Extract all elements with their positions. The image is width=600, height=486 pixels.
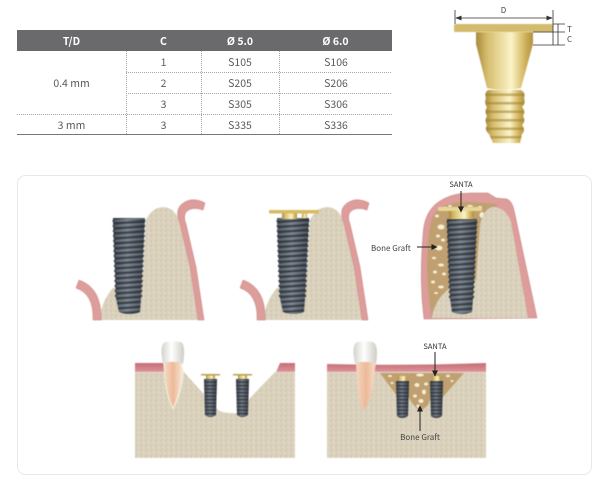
table header row: C: [160, 34, 167, 49]
dimension lines: [455, 10, 565, 45]
implant: [113, 218, 145, 314]
graft white particles: [431, 205, 484, 294]
tooth: [353, 342, 377, 411]
dimension labels: D: [501, 5, 507, 16]
gum left: [240, 280, 265, 320]
table header row: T/D: [63, 34, 80, 49]
dimension labels: C: [567, 34, 572, 45]
implant left: [396, 376, 409, 418]
illustration 2: implant with SANTA cap: [240, 200, 369, 320]
table body values: 0.4 mm: [53, 76, 90, 91]
implant left: [201, 374, 220, 417]
graft material: [427, 202, 497, 318]
table body values: 3 mm: [58, 118, 85, 133]
label: SANTA: SANTA: [449, 179, 473, 190]
bone: [263, 207, 362, 320]
gum: [327, 363, 486, 372]
bone block: [327, 372, 486, 458]
table header row: [17, 30, 392, 51]
table: T/D dimensions and product codes: [17, 30, 392, 135]
bone block: [135, 372, 295, 458]
gum left: [76, 280, 101, 320]
arrow to SANTA: [434, 352, 436, 376]
implant: [447, 219, 477, 314]
arrow to SANTA: [460, 191, 462, 212]
implant right: [233, 374, 252, 417]
table body values: 1: [161, 55, 167, 70]
illustration 4: ridge defect with two implants: [135, 342, 295, 458]
gold abutment flange: [454, 24, 553, 32]
table header row: Ø 5.0: [227, 34, 253, 49]
gold cap: [269, 210, 319, 219]
graft material: [380, 373, 464, 411]
dimension labels: T: [567, 24, 572, 35]
illustration 1: implant in ridge: [76, 200, 205, 320]
gold cap: [438, 207, 482, 219]
dimension labels: [501, 5, 572, 45]
implant: [277, 218, 309, 314]
table body values: 3: [161, 97, 167, 112]
arrow to bone graft: [417, 246, 437, 248]
table body values: S105: [228, 55, 252, 70]
table header row: Ø 6.0: [322, 34, 349, 49]
gold abutment thread: [485, 90, 525, 143]
illustration 3: bone graft over implant: [371, 179, 537, 319]
gum: [421, 193, 537, 319]
table body values: S205: [228, 76, 252, 91]
panel: surgical procedure illustrations: [18, 176, 592, 474]
table body values: S206: [324, 76, 348, 91]
bone: [99, 207, 198, 320]
table body values: S306: [324, 97, 348, 112]
bone: [432, 207, 528, 318]
gold abutment body: [476, 32, 533, 90]
graft white particles: [388, 374, 454, 408]
label: Bone Graft: Bone Graft: [371, 243, 411, 254]
abutment diagram with D, T, C dimensions: [454, 5, 572, 143]
table body values: S305: [228, 97, 252, 112]
arrow to bone graft: [419, 406, 421, 431]
illustration 5: ridge with bone graft and implants: [327, 341, 486, 458]
tooth: [161, 342, 184, 410]
table body values: S336: [324, 118, 348, 133]
table body values: S335: [228, 118, 252, 133]
gum: [135, 363, 295, 372]
implant right: [430, 376, 443, 418]
table body values: 3: [161, 118, 167, 133]
label: Bone Graft: Bone Graft: [400, 432, 440, 443]
label: SANTA: SANTA: [423, 341, 447, 352]
gum right: [342, 200, 369, 320]
table body values: S106: [324, 55, 348, 70]
table body values: [53, 55, 348, 133]
table body values: 2: [161, 76, 167, 91]
gum right: [178, 200, 205, 320]
